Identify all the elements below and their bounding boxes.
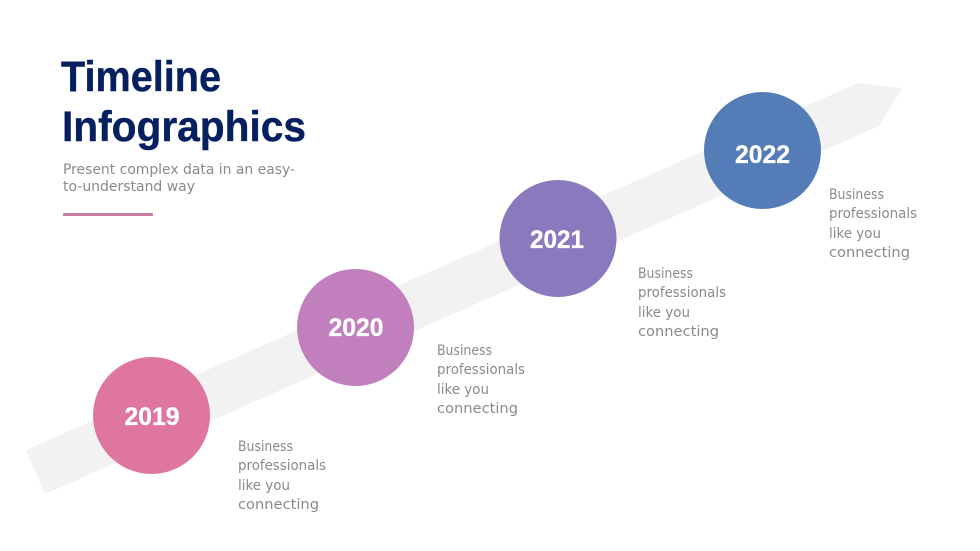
accent rule: [63, 213, 153, 216]
text 2019: professionals: [238, 458, 326, 474]
text 2020: connecting: [437, 401, 518, 417]
circle 2022: [704, 92, 821, 209]
text 2019: [238, 439, 326, 513]
text 2022: Business: [829, 187, 884, 203]
text 2020: [437, 343, 525, 417]
text 2021: connecting: [638, 324, 719, 340]
title: [61, 53, 306, 151]
text 2021: professionals: [638, 285, 726, 301]
milestone 2019: [93, 357, 210, 474]
year 2022: 2022: [735, 141, 790, 169]
year 2021: 2021: [530, 226, 584, 254]
year 2019: 2019: [124, 403, 180, 431]
text 2021: like you: [638, 305, 690, 321]
title: Timeline: [61, 53, 221, 101]
text 2020: Business: [437, 343, 492, 359]
text 2022: connecting: [829, 245, 910, 261]
text 2021: Business: [638, 266, 693, 282]
subtitle: Present complex data in an easy-: [63, 162, 295, 178]
text 2022: professionals: [829, 206, 917, 222]
text 2019: like you: [238, 478, 290, 494]
arrow band: [26, 83, 902, 494]
circle 2019: [93, 357, 210, 474]
milestone 2021: [500, 180, 616, 297]
text 2022: [829, 187, 917, 261]
text 2019: connecting: [238, 497, 319, 513]
text 2022: like you: [829, 226, 881, 242]
circle 2021: [500, 180, 616, 297]
title: Infographics: [62, 103, 306, 151]
milestone 2022: [704, 92, 821, 209]
year 2020: 2020: [328, 314, 384, 342]
text 2019: Business: [238, 439, 293, 455]
milestone 2020: [297, 269, 414, 386]
text 2021: [638, 266, 726, 340]
text 2020: like you: [437, 382, 489, 398]
subtitle: to-understand way: [63, 179, 195, 195]
text 2020: professionals: [437, 362, 525, 378]
circle 2020: [297, 269, 414, 386]
subtitle: [63, 162, 295, 195]
